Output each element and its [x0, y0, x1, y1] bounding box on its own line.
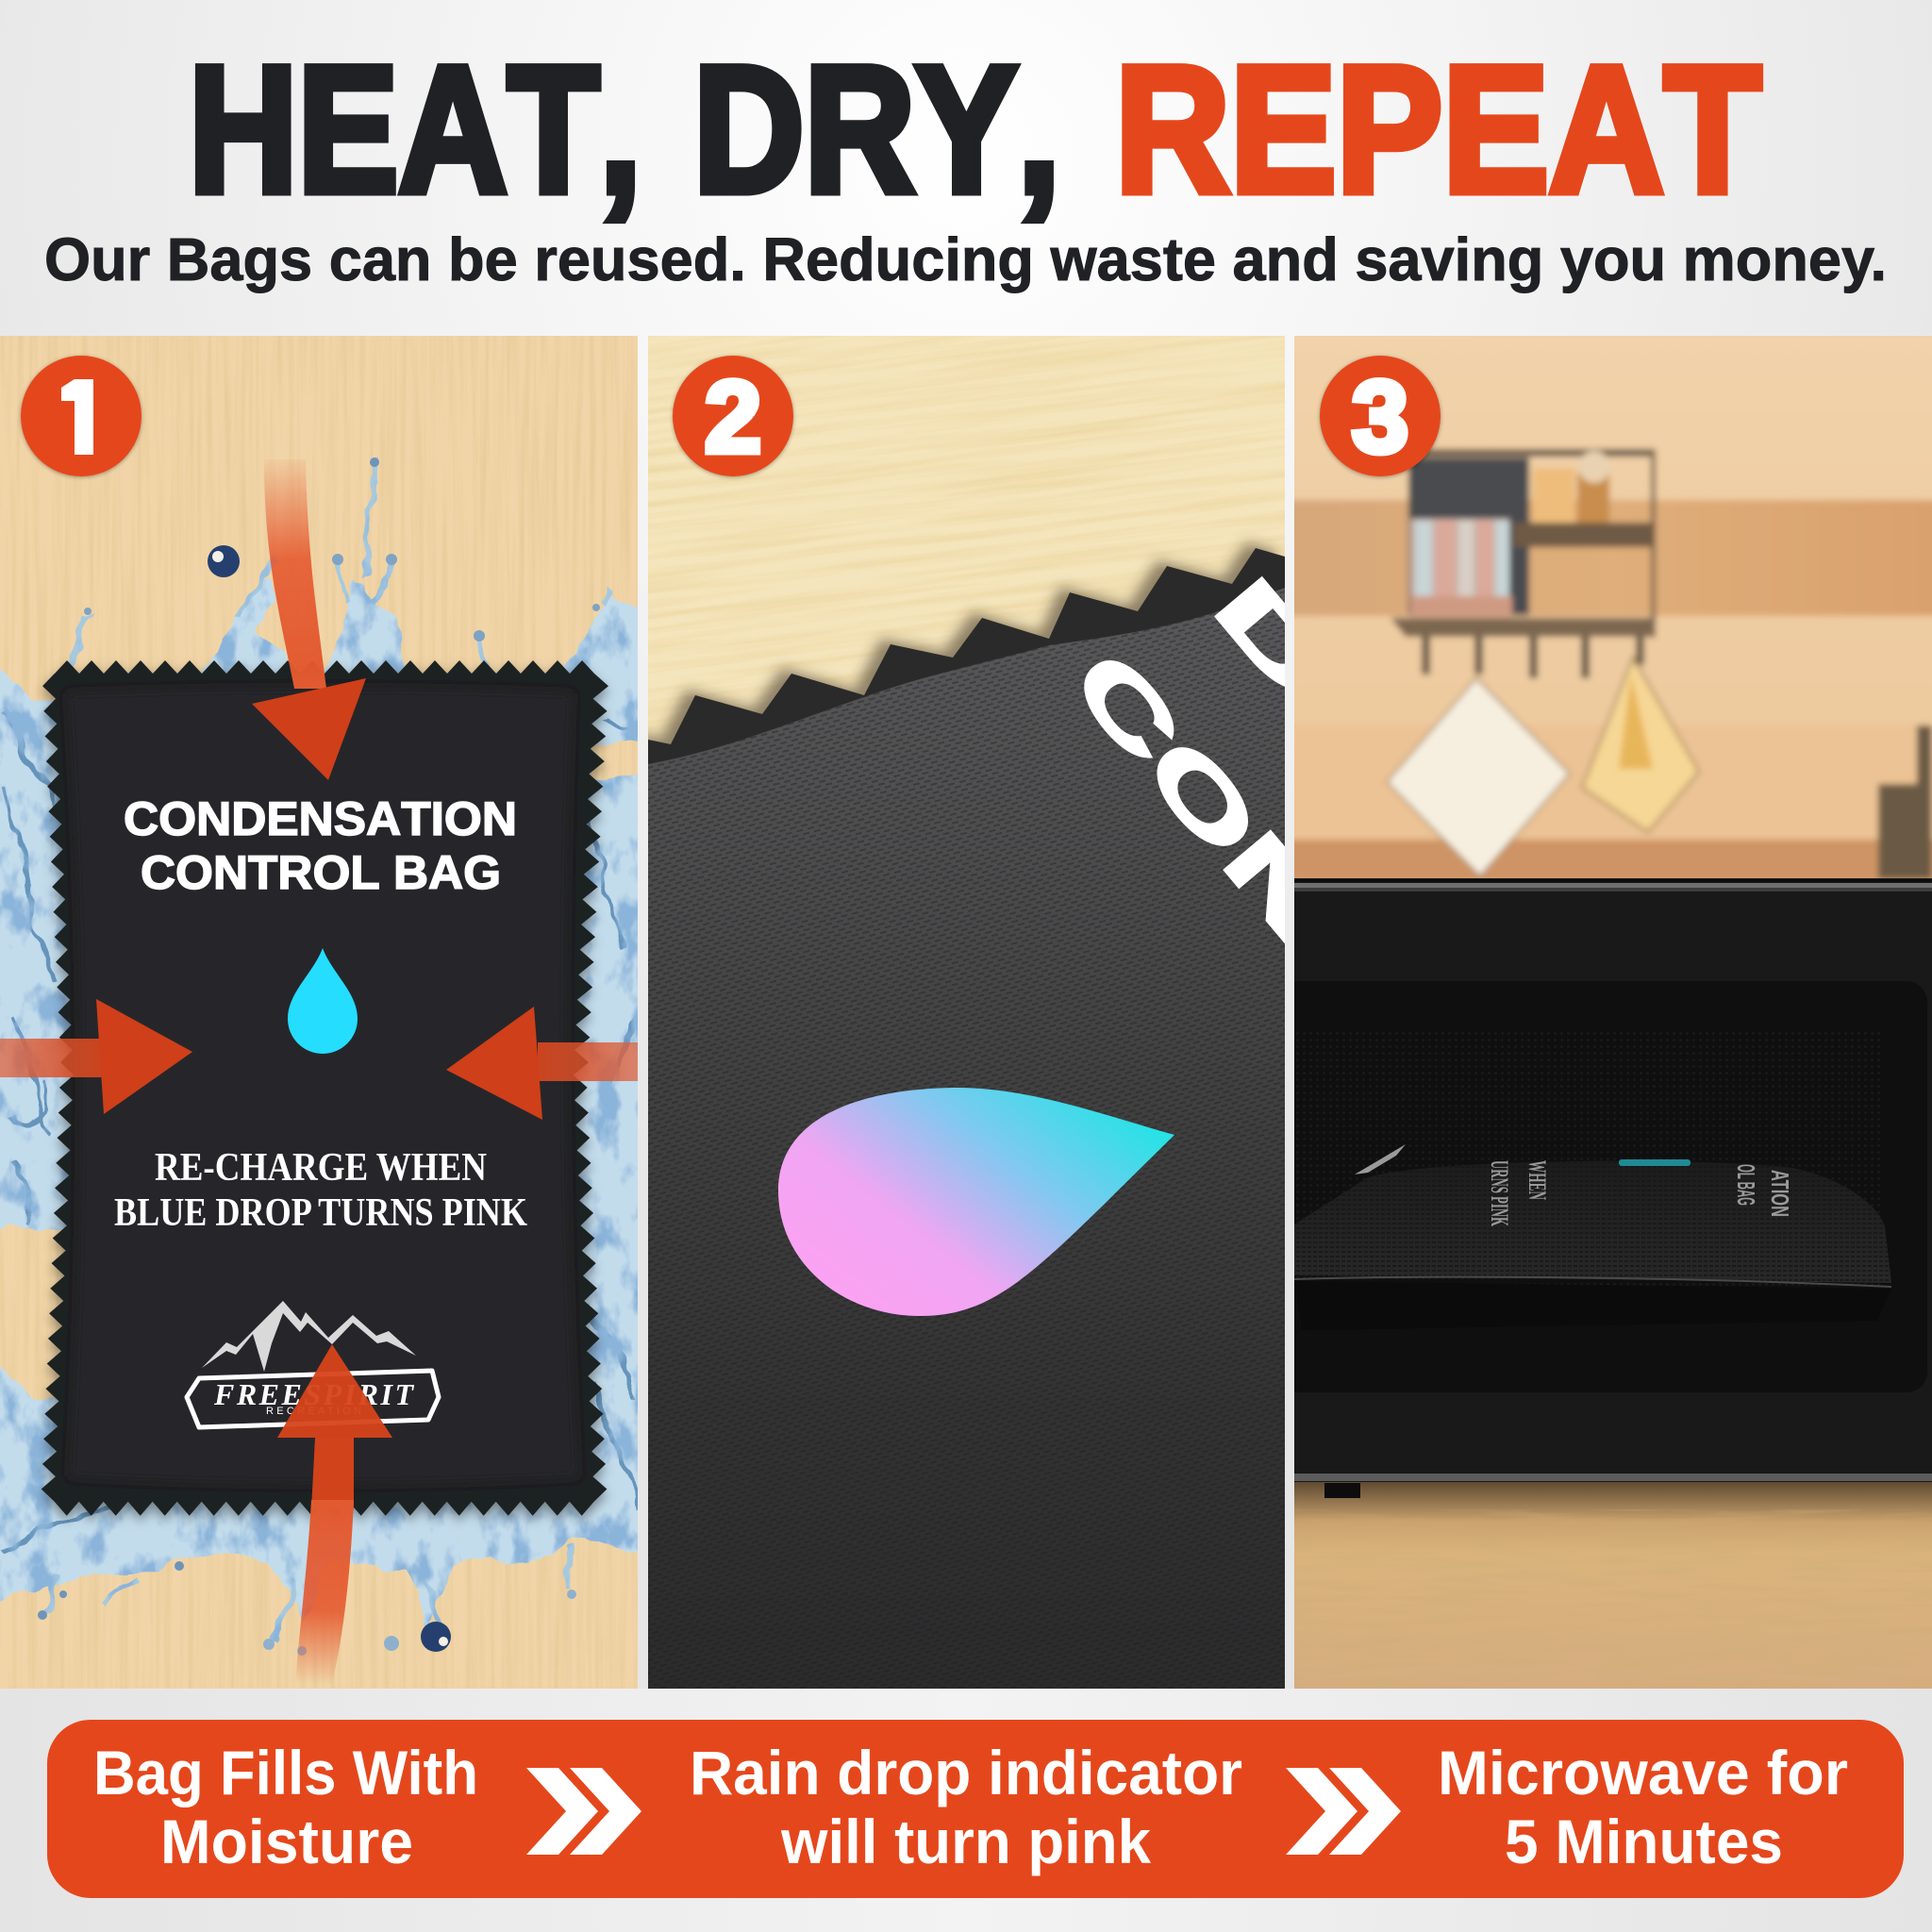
- pale wood background: [648, 336, 1285, 744]
- bag heading: [125, 801, 515, 891]
- badge: step 2: [673, 356, 793, 476]
- arrow: from top: [252, 459, 366, 780]
- bag print: rotated lettering: DENSATI: [1195, 558, 1766, 1213]
- bag print: rotated lettering: CONTROL: [1054, 633, 1624, 1288]
- subtitle: Our Bags can be reused. Reducing waste and saving you money.: [44, 225, 1887, 293]
- bag recharge text: RE-CHARGE WHEN: [155, 1146, 487, 1190]
- counter: [1294, 1481, 1932, 1689]
- bag recharge text: [115, 1153, 527, 1226]
- step text: indicator: [690, 1738, 1242, 1876]
- bag print: rotated lettering: [1084, 575, 1285, 943]
- microwave body: [1294, 878, 1932, 1498]
- print on microwaved bag: ATION: [1766, 1170, 1794, 1217]
- print on microwaved bag: WHEN: [1524, 1160, 1551, 1200]
- logo: Freespirit Recreation: FREESPIRIT: [213, 1377, 414, 1411]
- white towel: [1387, 678, 1570, 876]
- step text: bag fills: Bag Fills With: [93, 1738, 478, 1807]
- step text: indicator: Rain drop indicator: [690, 1738, 1242, 1807]
- panel: step 3 microwave: [1264, 321, 1932, 1689]
- bag: [42, 660, 608, 1516]
- wood background: [0, 336, 638, 1689]
- yellow towel: [1582, 658, 1699, 832]
- step text: microwave: 5 Minutes: [1505, 1807, 1783, 1876]
- arrow: from bottom: [277, 1344, 392, 1684]
- panel: step 1 bag absorbing moisture: [0, 336, 660, 1689]
- icon: double chevron 1: [526, 1768, 641, 1855]
- bag teeth edge: [648, 548, 1285, 783]
- title: DRY,: [693, 29, 1060, 230]
- logo: Freespirit Recreation: RECREATION: [266, 1406, 361, 1417]
- step text: indicator: will turn pink: [780, 1807, 1151, 1876]
- print on microwaved bag: [1355, 1144, 1794, 1226]
- bag recharge text: BLUE DROP TURNS PINK: [114, 1191, 527, 1235]
- microwave door window: [1264, 981, 1927, 1392]
- print on microwaved bag: OL BAG: [1732, 1164, 1760, 1206]
- badge: step 3: 3: [1352, 359, 1408, 474]
- bag heading: CONTROL BAG: [141, 846, 501, 899]
- bag heading: CONDENSATION: [124, 792, 517, 845]
- kitchen wall: [1274, 321, 1932, 887]
- wall shelf: [1391, 449, 1656, 678]
- badge: step 1: 1: [52, 359, 110, 477]
- water droplets: [38, 458, 600, 1656]
- badge: step 1: [21, 356, 142, 477]
- bag inside microwave: URNS PINK: [1486, 1160, 1513, 1226]
- title: REPEAT: [1115, 29, 1761, 230]
- step text: microwave: Microwave for: [1438, 1738, 1848, 1807]
- bottom process bar: [47, 1720, 1904, 1898]
- badge: step 2: 2: [705, 359, 761, 474]
- cutting board: [1878, 725, 1932, 879]
- badge: step 3: [1320, 356, 1441, 476]
- bag inside microwave: [1294, 1144, 1891, 1330]
- logo: Freespirit Recreation: [187, 1301, 439, 1427]
- water splash: [0, 462, 660, 1646]
- step text: bag fills: Moisture: [160, 1807, 413, 1876]
- icon: pink to blue drop indicator: [778, 1088, 1174, 1316]
- icon: blue water drop: [288, 948, 358, 1054]
- step text: bag fills: [93, 1738, 478, 1876]
- title: [189, 29, 1761, 230]
- title: HEAT,: [189, 29, 641, 230]
- arrow: from left: [0, 999, 192, 1114]
- step text: microwave: [1438, 1738, 1848, 1876]
- arrow: from right: [446, 1007, 638, 1120]
- panel: step 2 drop indicator closeup: [648, 336, 1285, 1689]
- icon: double chevron 2: [1286, 1768, 1401, 1855]
- bag fabric: [648, 588, 1285, 1689]
